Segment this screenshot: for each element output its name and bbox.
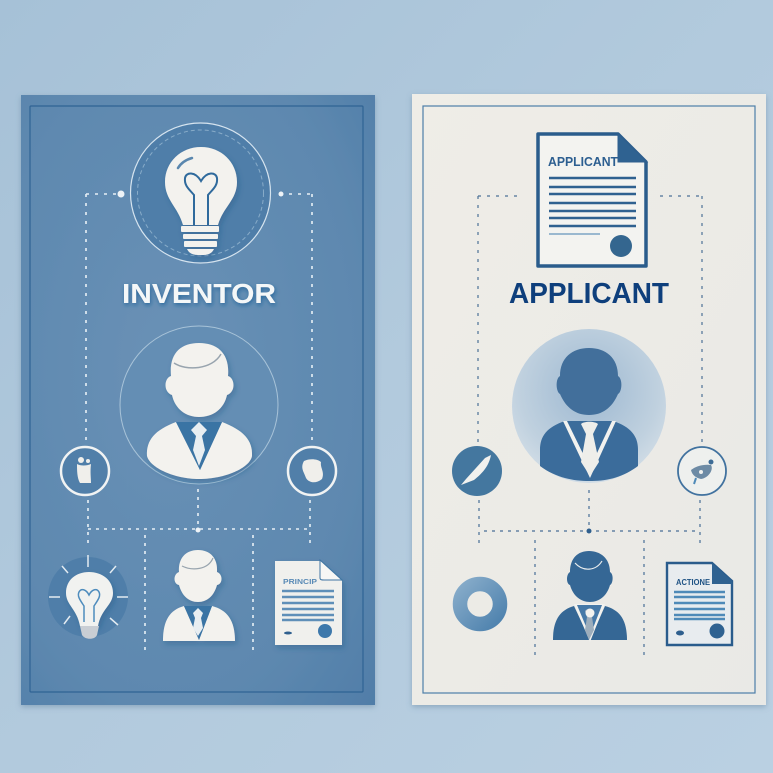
inner border [30,106,363,692]
icon: circle right [288,447,336,495]
icon: circle left [61,447,109,495]
icon: donut [460,584,500,624]
document label: ACTIONE [676,578,711,587]
connector lines top [86,194,312,445]
icon: inventor person [120,326,278,484]
document label: APPLICANT [548,154,618,169]
icon: small person [553,551,627,642]
icon: outlined circle [678,447,726,495]
icon: filled circle with pen [452,446,502,496]
icon: lightbulb in circle [130,123,270,263]
connector lines bottom [88,190,310,655]
connector lines top [478,196,702,445]
inner border [423,106,755,693]
panel: inventor [21,95,375,705]
panel card [21,95,375,705]
icon: small document [667,563,732,645]
heading: inventor: INVENTOR [122,278,276,309]
panel: applicant [412,94,766,705]
panel card [412,94,766,705]
icon: small person [163,550,235,641]
connector lines bottom [479,490,700,658]
icon: application document [538,134,647,266]
document label: PRINCIP [283,579,317,586]
icon: small document [275,560,342,645]
icon: small lightbulb [48,555,128,639]
heading: applicant: APPLICANT [509,278,669,310]
icon: applicant person [512,329,666,483]
